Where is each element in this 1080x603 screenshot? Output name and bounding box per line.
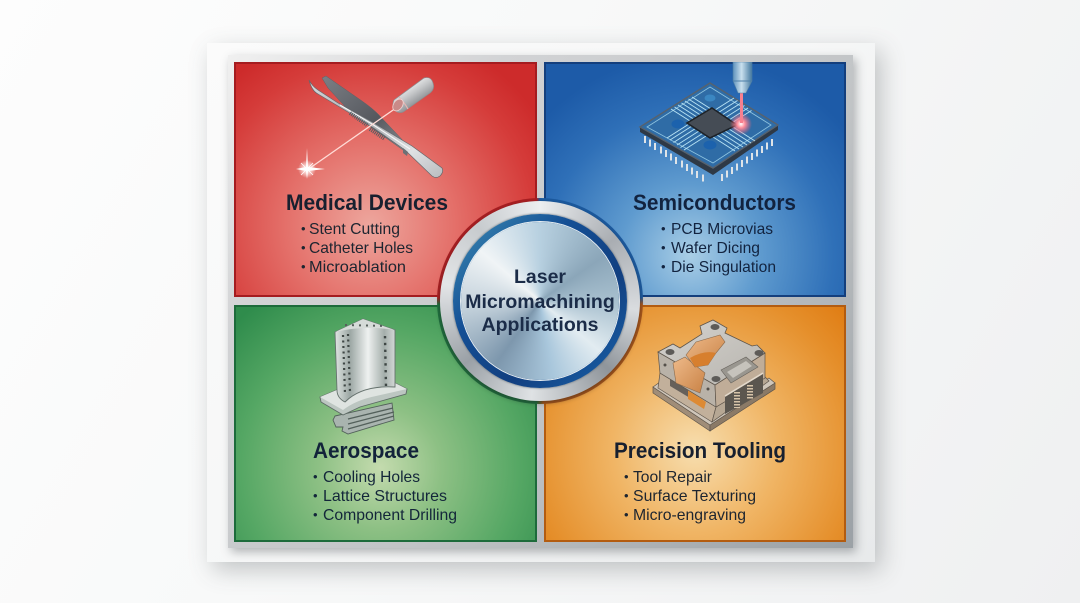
panel: aerospace	[234, 305, 537, 542]
list: aerospace uses: •	[313, 507, 318, 522]
panel: precision tooling	[544, 305, 846, 542]
list: medical uses: Microablation	[309, 259, 406, 276]
list: aerospace uses: •	[313, 469, 318, 484]
list: tooling uses: •	[624, 488, 629, 503]
panel: medical devices	[234, 62, 537, 297]
list: semiconductor uses: •	[661, 221, 666, 236]
list: aerospace uses: •	[313, 488, 318, 503]
heading: Aerospace: Aerospace	[313, 438, 419, 463]
central metal hub	[437, 198, 643, 404]
list: aerospace uses: Component Drilling	[323, 507, 457, 524]
heading: Semiconductors: Semiconductors	[633, 190, 796, 215]
hub title: Applications: Applications	[481, 314, 598, 336]
list: tooling uses: Tool Repair	[633, 469, 713, 486]
list: semiconductor uses: PCB Microvias	[671, 221, 773, 238]
list: medical uses: •	[301, 221, 306, 236]
panel: semiconductors	[544, 62, 846, 297]
list: medical uses: Stent Cutting	[309, 221, 400, 238]
icon: turbine blade	[320, 319, 407, 434]
list: semiconductor uses: Wafer Dicing	[671, 240, 760, 257]
list: medical uses	[301, 221, 413, 276]
list: medical uses: •	[301, 259, 306, 274]
list: semiconductor uses: •	[661, 240, 666, 255]
list: semiconductor uses	[661, 221, 776, 276]
icon: mold block	[653, 320, 775, 431]
list: tooling uses: Surface Texturing	[633, 488, 756, 505]
white display board	[207, 43, 875, 562]
list: aerospace uses	[313, 469, 457, 524]
list: medical uses: •	[301, 240, 306, 255]
list: tooling uses: •	[624, 469, 629, 484]
list: medical uses: Catheter Holes	[309, 240, 413, 257]
metal frame	[228, 55, 853, 548]
list: semiconductor uses: •	[661, 259, 666, 274]
list: aerospace uses: Cooling Holes	[323, 469, 420, 486]
hub title: Micromachining: Micromachining	[465, 291, 615, 313]
heading: Medical Devices: Medical Devices	[286, 190, 448, 215]
list: semiconductor uses: Die Singulation	[671, 259, 776, 276]
icon: microchip with laser	[640, 62, 778, 182]
list: tooling uses	[624, 469, 756, 524]
list: tooling uses: •	[624, 507, 629, 522]
heading: Precision Tooling: Precision Tooling	[614, 438, 786, 463]
list: aerospace uses: Lattice Structures	[323, 488, 447, 505]
hub title: Laser: Laser	[514, 266, 566, 288]
icon: tweezers and laser	[296, 76, 443, 179]
list: tooling uses: Micro-engraving	[633, 507, 746, 524]
